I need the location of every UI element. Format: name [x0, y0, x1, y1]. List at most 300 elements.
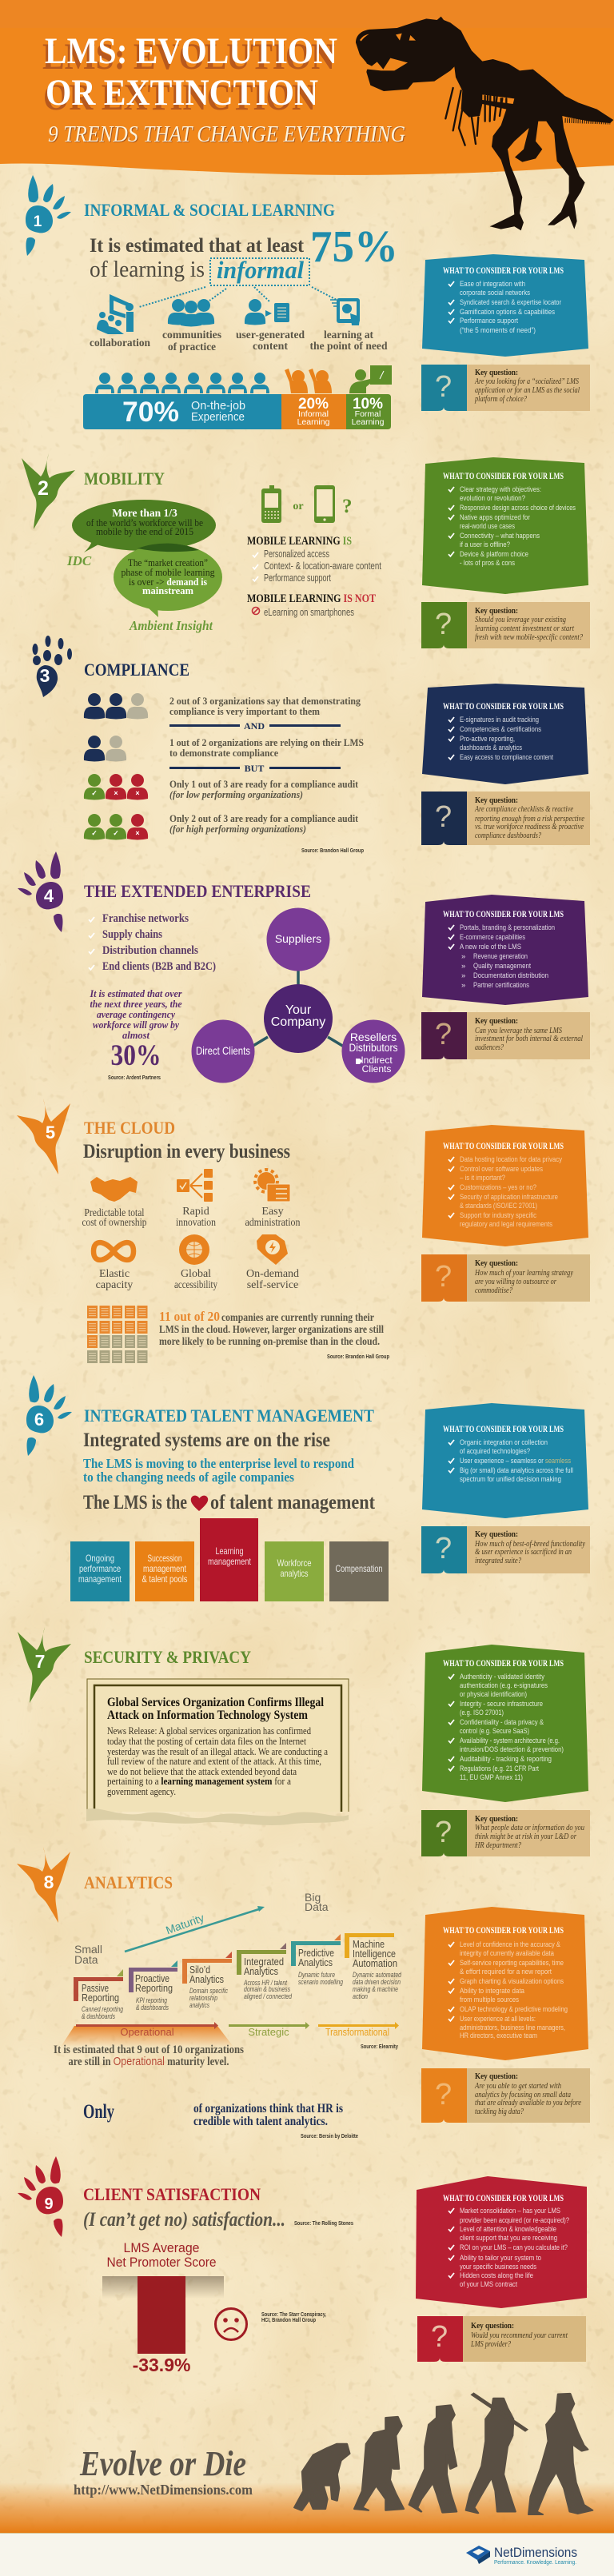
panel: what to consider 4: »: [461, 952, 465, 961]
news clipping: [86, 1679, 349, 1825]
panel: what to consider 5: Customizations – yes or no?: [460, 1183, 536, 1192]
labels row 1: Predictable total: [85, 1207, 145, 1219]
labels: small data, big data: [74, 1891, 329, 1966]
section 8: analytics: [17, 1847, 402, 2139]
panel: what to consider 4: »: [461, 971, 465, 980]
panel: what to consider 7: Integrity - secure infrastructure: [460, 1700, 543, 1709]
key question 5: are you willing to outsource or: [475, 1278, 557, 1286]
labels: small data, big data: Small: [74, 1943, 102, 1956]
section 5: the cloud: [17, 1099, 389, 1363]
panel: what to consider 5: Support for industry specific: [460, 1211, 536, 1220]
key question 7: [421, 1810, 590, 1856]
panel: what to consider 8: administrators, business line managers,: [460, 2024, 565, 2032]
illustration: t-rex skeleton: [354, 17, 613, 230]
icon: rapid innovation: [177, 1169, 213, 1202]
step labels: data driven decision: [353, 1978, 401, 1986]
panel: what to consider 1: corporate social networks: [460, 289, 530, 297]
panel: what to consider 3: Easy access to compliance content: [460, 753, 553, 762]
paw icon 3: 3: [40, 665, 50, 686]
illustration: evolution of man: [294, 2394, 592, 2514]
key question 1: platform of choice?: [474, 395, 528, 404]
section 2: mobility: [22, 453, 381, 633]
step labels: Intelligence: [353, 1948, 396, 1960]
panel: what to consider 6: Big (or small) data analytics across the full: [460, 1466, 573, 1475]
heading: THE CLOUD: [84, 1118, 175, 1138]
panel: what to consider 9: ROI on your LMS – can you calculate it?: [460, 2243, 568, 2252]
text: 1 of 2 relying: to demonstrate compliance: [169, 747, 278, 759]
paw icon 3: [32, 636, 72, 697]
panel: what to consider 3: Competencies & certifications: [460, 725, 541, 734]
labels row 2: Elastic: [99, 1268, 130, 1280]
people: 2 of 3 ready: ✓: [91, 829, 98, 837]
panel: what to consider 4: Revenue generation: [473, 952, 528, 961]
claw icon 8: 8: [44, 1872, 54, 1892]
panel: what to consider 8: Self-service reporting capabilities, time: [460, 1959, 564, 1968]
source: Rolling Stones: Source: The Rolling Stones: [294, 2219, 353, 2227]
clipping headline: Global Services Organization Confirms Illegal: [107, 1696, 324, 1709]
panel: what to consider 3: dashboards & analytics: [460, 744, 522, 752]
icon: learning at the point of need: [330, 298, 360, 325]
panel: what to consider 1: Syndicated search & expertise locator: [460, 298, 561, 307]
section 7: security and privacy: [18, 1627, 349, 1825]
list: mobile learning is: Performance support: [264, 572, 331, 584]
checklist: [89, 912, 216, 973]
step labels: domain & business: [244, 1985, 290, 1993]
panel: what to consider 1: Ease of integration with: [460, 280, 525, 289]
step labels: Automation: [353, 1957, 397, 1969]
block chart: talent suite: management: [208, 1556, 252, 1567]
stacked bar 70-20-10: On-the-job: [191, 399, 245, 413]
icon: phones: ?: [342, 496, 352, 517]
divider: but: [169, 763, 341, 774]
panel: what to consider 6: of acquired technologies?: [460, 1447, 530, 1456]
title: OR EXTINCTION: [46, 72, 318, 114]
labels row 1: Rapid: [182, 1206, 209, 1218]
footer strip: [0, 2533, 614, 2576]
heading: CLIENT SATISFACTION: [83, 2184, 261, 2204]
source: Source: Brandon Hall Group: [327, 1353, 389, 1360]
source: Brandon Hall: Source: Brandon Hall Group: [301, 847, 364, 854]
panel: what to consider 7: or physical identification): [460, 1690, 527, 1699]
panel: what to consider 8: [422, 1907, 588, 2060]
people: 2 of 3 ready: [84, 814, 148, 839]
clipping body: we do not believe that the attack extended beyond data: [107, 1765, 297, 1777]
subtitle: 9 TRENDS THAT CHANGE EVERYTHING: [49, 122, 406, 148]
stacked bar 70-20-10: Informal: [298, 409, 329, 419]
labels: small data, big data: Data: [305, 1900, 329, 1913]
logo: NetDimensions: NetDimensions: [494, 2545, 577, 2560]
labels for learning types: collaboration: [90, 337, 150, 349]
statement: 9 of 10: [54, 2044, 244, 2068]
step labels: action: [353, 1992, 368, 2000]
step labels: Reporting: [82, 1992, 119, 2004]
panel: what to consider 2: Connectivity – what happens: [460, 532, 540, 540]
logo: NetDimensions: Performance. Knowledge. Learning.: [494, 2560, 576, 2566]
panel: what to consider 8: from multiple sources: [460, 1996, 519, 2004]
clipping body: [107, 1725, 328, 1797]
panel: what to consider 6: Organic integration or collection: [460, 1438, 548, 1447]
speech bubble: IDC: of the world’s workforce will be: [86, 517, 203, 528]
stat: 30% contingency workforce: average contingency: [97, 1008, 175, 1020]
key question 3: ?: [435, 800, 452, 834]
key question 7: HR department?: [474, 1841, 522, 1850]
step labels: Analytics: [189, 1973, 224, 1985]
panel: what to consider 2: - lots of pros & cons: [460, 559, 515, 568]
panel: what to consider 8: Graph charting & visualization options: [460, 1977, 564, 1986]
stat: 30% contingency workforce: workforce will grow by: [93, 1019, 179, 1031]
panel: what to consider 4: Portals, branding & personalization: [460, 923, 555, 932]
people: 2 of 3 ready: ✓: [113, 829, 119, 837]
step labels: Silo’d: [189, 1964, 210, 1976]
key question 5: [421, 1254, 590, 1302]
statement: 75% informal: 75%: [310, 222, 398, 272]
panel: what to consider 2: evolution or revolution?: [460, 494, 525, 503]
step labels: Canned reporting: [82, 2005, 123, 2013]
teal statement: The LMS is moving to the enterprise level to respond: [83, 1456, 354, 1471]
panel: what to consider 2: Clear strategy with objectives:: [460, 485, 541, 494]
key question 6: integrated suite?: [475, 1557, 522, 1565]
people: 2 of 3 ready: ×: [135, 829, 140, 837]
text: cloud stat: companies are currently running their: [221, 1311, 374, 1323]
statement: HR credibility: of organizations think that HR is: [193, 2102, 343, 2115]
clipping body: News Release: A global services organization has confirmed: [107, 1725, 311, 1737]
panel: what to consider 9: Market consolidation – has your LMS: [460, 2207, 560, 2215]
panel: what to consider 3: Pro-active reporting,: [460, 735, 515, 744]
panel: what to consider 7: Availability - system architecture (e.g.: [460, 1737, 560, 1745]
key question 2: fresh with new mobile-specific content?: [475, 633, 584, 642]
maturity phases arrows: Strategic: [248, 2026, 289, 2038]
text: cloud stat: more likely to be running on-premise than in the cloud.: [159, 1335, 380, 1347]
labels for learning types: [90, 329, 388, 353]
key question 1: application or for an LMS as the social: [475, 386, 580, 395]
claw icon 7: [18, 1627, 71, 1703]
clipping body: full review of the nature and extent of the attack. At this time,: [107, 1755, 321, 1767]
key question 6: & user experience is sacrificed in an: [475, 1548, 572, 1557]
statement: HR credibility: credible with talent analytics.: [193, 2115, 328, 2128]
statement: 75% informal: of learning is: [90, 257, 205, 282]
panel: what to consider 5: [422, 1125, 588, 1246]
source: Ambient Insight: Ambient Insight: [129, 618, 213, 633]
key question 2: learning content investment or start: [475, 624, 575, 633]
icon: easy administration: [255, 1170, 290, 1202]
heading: ANALYTICS: [84, 1872, 173, 1892]
list: mobile learning is not: MOBILE LEARNING IS NOT: [247, 592, 376, 605]
section 1: informal and social learning: [26, 175, 398, 429]
panel: what to consider 9: provider been acquired (or re-acquired)?: [460, 2216, 569, 2225]
clipping headline: [107, 1696, 324, 1722]
header banner: [0, 0, 614, 175]
key question 2: Key question:: [475, 607, 518, 616]
diagram: your company network: Direct Clients: [196, 1044, 250, 1057]
panel: what to consider 4: E-commerce capabilities: [460, 933, 525, 942]
key question 8: Key question:: [475, 2072, 518, 2081]
text: 2 of 3 important: [169, 695, 361, 717]
key question 9: [417, 2316, 586, 2362]
step labels: scenario modelling: [298, 1978, 343, 1986]
block chart: talent suite: Compensation: [336, 1563, 382, 1574]
text: 2 of 3 important: 2 out of 3 organizations say that demonstrating: [169, 695, 361, 707]
step labels: Integrated: [244, 1956, 284, 1968]
block chart: talent suite: Workforce: [277, 1557, 312, 1569]
text: 1 of 2 relying: [169, 736, 364, 759]
title: LMS: EVOLUTION: [45, 30, 337, 72]
clipping body: government agency.: [107, 1785, 176, 1797]
icon: handshake: [90, 1177, 138, 1202]
panel: what to consider 4: »: [461, 962, 465, 971]
paw icon 6: 6: [34, 1410, 44, 1430]
source: IDC: IDC: [66, 553, 92, 568]
key question 5: Key question:: [475, 1259, 518, 1268]
subtitle: 9 TRENDS THAT CHANGE EVERYTHING: [48, 122, 405, 147]
key question 8: [421, 2068, 590, 2123]
paw icon 9: [18, 2156, 63, 2237]
panel: what to consider 8: Level of confidence in the accuracy &: [460, 1940, 561, 1949]
source: Elearnity: Source: Elearnity: [361, 2043, 399, 2050]
step labels: & dashboards: [136, 2004, 169, 2012]
panel: what to consider 1: Gamification options & capabilities: [460, 308, 555, 317]
closing message: Evolve or Die: [79, 2444, 246, 2483]
panel: what to consider 7: authentication (e.g. e-signatures: [460, 1681, 548, 1690]
labels for learning types: content: [253, 341, 288, 353]
labels for learning types: of practice: [168, 341, 216, 353]
key question 4: investment for both internal & external: [475, 1035, 583, 1043]
key question 9: ?: [431, 2320, 448, 2354]
maturity phases arrows: Transformational: [325, 2026, 389, 2038]
stacked bar 70-20-10: [83, 394, 391, 429]
checklist: End clients (B2B and B2C): [102, 960, 216, 973]
key question 2: Should you leverage your existing: [475, 616, 566, 624]
footer fade: [0, 2482, 614, 2533]
key question 3: [421, 792, 590, 845]
panel: what to consider 5: WHAT TO CONSIDER FOR YOUR LMS: [443, 1142, 564, 1151]
statement: LMS is the heart: The LMS is the: [83, 1492, 187, 1513]
key question 3: compliance dashboards?: [475, 831, 542, 840]
divider: and: [169, 720, 341, 732]
claw icon 2: 2: [38, 477, 49, 500]
paw icon 6: [26, 1375, 72, 1456]
labels row 1: cost of ownership: [82, 1217, 147, 1229]
labels row 2: Global: [181, 1268, 211, 1280]
stacked bar 70-20-10: Learning: [297, 417, 330, 427]
speech bubble: IDC: [72, 500, 222, 617]
checklist: Supply chains: [102, 928, 162, 941]
stat: 30% contingency workforce: It is estimated that over: [90, 987, 182, 999]
step labels: Across HR / talent: [243, 1979, 287, 1987]
key question 3: Are compliance checklists & reactive: [474, 805, 573, 814]
paw icon 1: 1: [34, 213, 42, 230]
icon: sad face: [216, 2309, 246, 2339]
labels row 1: innovation: [176, 1217, 216, 1229]
section 3: compliance: [32, 636, 364, 854]
panel: what to consider 2: [422, 457, 588, 594]
paw icon 4: [18, 851, 63, 932]
panel: what to consider 1: Performance support: [460, 317, 518, 325]
key question 2: ?: [435, 608, 452, 641]
panel: what to consider 8: Ability to integrate data: [460, 1987, 525, 1996]
panel: what to consider 7: Auditability - tracking & reporting: [460, 1755, 552, 1764]
statement: 75% informal: informal: [217, 256, 304, 284]
people: 1 of 3 ready: ✓: [91, 789, 98, 797]
labels row 1: Easy: [261, 1206, 284, 1218]
icon: global accessibility: [179, 1234, 209, 1265]
step labels: relationship: [189, 1994, 217, 2002]
chart: net promoter score: [102, 2240, 224, 2375]
panel: what to consider 6: WHAT TO CONSIDER FOR YOUR LMS: [443, 1425, 564, 1434]
clipping body: pertaining to a learning management system for a: [107, 1775, 291, 1787]
panel: what to consider 9: Ability to tailor your system to: [460, 2254, 541, 2263]
key question 1: ?: [435, 370, 452, 404]
logo: NetDimensions: [466, 2545, 577, 2566]
heading: MOBILITY: [84, 469, 165, 488]
source: Bersin: Source: Bersin by Deloitte: [301, 2132, 358, 2139]
list: mobile learning is: MOBILE LEARNING IS: [247, 535, 352, 548]
text: cloud stat: 11 out of 20: [159, 1309, 220, 1324]
stat: 30% contingency workforce: the next three years, the: [90, 998, 182, 1010]
icon: on-demand self-service: [257, 1234, 288, 1265]
heading: INTEGRATED TALENT MANAGEMENT: [84, 1406, 374, 1426]
step labels: Domain specific: [189, 1987, 228, 1995]
key question 6: [421, 1526, 590, 1573]
panel: what to consider 7: WHAT TO CONSIDER FOR YOUR LMS: [443, 1659, 564, 1669]
claw icon 5: 5: [46, 1123, 55, 1142]
panel: what to consider 7: 11, EU GMP Annex 11): [460, 1773, 523, 1782]
panel: what to consider 7: (e.g. ISO 27001): [460, 1709, 504, 1717]
speech bubble: Ambient Insight: mainstream: [142, 585, 194, 596]
step labels: Passive: [82, 1982, 109, 1994]
step labels: aligned / connected: [244, 1992, 293, 2000]
panel: what to consider 8: HR directors, executive team: [460, 2032, 537, 2040]
statement: 9 of 10: It is estimated that 9 out of 10 organizations: [54, 2044, 244, 2056]
title: OR EXTINCTION: [43, 77, 316, 118]
subheading: Integrated systems are on the rise: [83, 1430, 330, 1451]
panel: what to consider 9: client support that you are receiving: [460, 2234, 557, 2243]
stacked bar 70-20-10: Experience: [191, 410, 245, 424]
checklist: Distribution channels: [102, 944, 198, 957]
block chart: talent suite: [70, 1518, 389, 1601]
key question 8: analytics by focusing on small data: [475, 2091, 571, 2099]
labels for learning types: learning at: [324, 329, 373, 341]
block chart: talent suite: Succession: [147, 1553, 182, 1564]
panel: what to consider 3: E-signatures in audit tracking: [460, 716, 539, 724]
panel: what to consider 5: Security of application infrastructure: [460, 1193, 558, 1202]
text: cloud stat: LMS in the cloud. However, larger organizations are still: [159, 1323, 384, 1335]
panel: what to consider 5: Data hosting location for data privacy: [460, 1155, 562, 1164]
paw icon 4: 4: [44, 886, 54, 906]
step labels: [82, 1938, 402, 2020]
step labels: Dynamic future: [298, 1971, 335, 1979]
source: Starr Conspiracy: [261, 2311, 326, 2323]
step labels: KPI reporting: [136, 1996, 167, 2004]
key question 4: Can you leverage the same LMS: [475, 1027, 563, 1035]
claw icon 5: [17, 1099, 70, 1174]
diagram: your company network: Clients: [362, 1063, 391, 1075]
divider: and: AND: [244, 720, 265, 732]
block chart: talent suite: Ongoing: [86, 1553, 114, 1564]
labels row 1: [82, 1206, 301, 1229]
step labels: Predictive: [298, 1947, 334, 1959]
block chart: talent suite: performance: [79, 1563, 121, 1574]
quote: (I can’t get no) satisfaction...: [83, 2209, 285, 2231]
text: low performers: Only 1 out of 3 are ready for a compliance audit: [169, 778, 359, 790]
arrow: maturity: Maturity: [164, 1911, 205, 1936]
stacked bar 70-20-10: 20%: [298, 396, 329, 413]
step labels: Reporting: [135, 1982, 173, 1994]
panel: what to consider 2: Device & platform choice: [460, 550, 528, 559]
title: LMS: EVOLUTION: [42, 36, 335, 78]
diagram: your company network: Distributors: [349, 1041, 398, 1054]
diagram: your company network: Suppliers: [275, 932, 321, 945]
chart: net promoter score: LMS Average: [123, 2240, 200, 2255]
list: mobile learning is: Context- & location-aware content: [264, 560, 381, 572]
labels row 1: administration: [245, 1217, 301, 1229]
panel: what to consider 9: your specific business needs: [460, 2263, 536, 2271]
arrow: maturity: [125, 1906, 265, 1952]
panel: what to consider 4: Partner certifications: [473, 981, 529, 990]
panel: what to consider 4: »: [461, 981, 465, 990]
claw icon 2: [22, 453, 75, 529]
key question 9: Would you recommend your current: [471, 2331, 568, 2340]
labels row 2: capacity: [96, 1279, 133, 1291]
panel: what to consider 7: [422, 1645, 588, 1802]
key question 4: Key question:: [475, 1017, 518, 1026]
panel: what to consider 5: & standards (ISO/IEC 27001): [460, 1202, 537, 1210]
panel: what to consider 3: [422, 684, 588, 784]
diagram: your company network: [192, 908, 405, 1083]
key question 7: think might be at risk in your L&D or: [475, 1832, 577, 1841]
statement: 75% informal: It is estimated that at least: [90, 235, 305, 257]
people: 1 of 2: [84, 736, 126, 761]
panel: what to consider 9: Level of attention & knowledgeable: [460, 2225, 556, 2234]
step labels: Proactive: [135, 1972, 169, 1984]
key question 8: that are already available to you before: [475, 2099, 581, 2107]
stat: 30% contingency workforce: Source: Ardent Partners: [108, 1074, 161, 1081]
panel: what to consider 5: – is it important?: [460, 1174, 505, 1182]
key question 9: LMS provider?: [470, 2340, 512, 2349]
key question 5: commoditise?: [475, 1286, 513, 1295]
speech bubble: Ambient Insight: The “market creation”: [128, 557, 208, 568]
chart: net promoter score: Net Promoter Score: [107, 2255, 216, 2270]
panel: what to consider 6: User experience – seamless or seamless: [460, 1457, 571, 1465]
section 6: integrated talent management: [26, 1375, 389, 1601]
source: Starr Conspiracy: Source: The Starr Conspiracy,: [261, 2311, 326, 2318]
text: high performers: (for high performing organizations): [169, 823, 306, 835]
list: mobile learning is not: [247, 592, 376, 618]
key question 7: What people data or information do you: [475, 1824, 584, 1832]
panel: what to consider 9: [416, 2176, 587, 2308]
panel: what to consider 5: regulatory and legal requirements: [460, 1220, 552, 1229]
claw icon 8: [17, 1847, 70, 1923]
maturity phases arrows: Operational: [120, 2026, 174, 2038]
claw icon 7: 7: [35, 1651, 45, 1672]
block chart: talent suite: analytics: [280, 1568, 309, 1579]
key question 4: audiences?: [475, 1043, 504, 1052]
paw icon 9: 9: [44, 2195, 54, 2213]
panel: what to consider 9: of your LMS contract: [460, 2280, 517, 2289]
divider: but: BUT: [245, 763, 264, 774]
step labels: analytics: [189, 2001, 209, 2009]
list: mobile learning is not: eLearning on smartphones: [264, 607, 354, 618]
panel: what to consider 5: Control over software updates: [460, 1165, 543, 1174]
icon: phones: [261, 485, 352, 523]
step labels: & dashboards: [82, 2012, 115, 2020]
key question 4: ?: [435, 1018, 452, 1051]
statement: LMS is the heart: of talent management: [210, 1492, 376, 1513]
panel: what to consider 8: User experience at all levels:: [460, 2015, 536, 2024]
block chart: talent suite: management: [78, 1573, 122, 1585]
stacked bar 70-20-10: 70%: [122, 397, 179, 428]
icon: elastic capacity: [94, 1242, 134, 1260]
paw icon 1: [26, 175, 71, 256]
